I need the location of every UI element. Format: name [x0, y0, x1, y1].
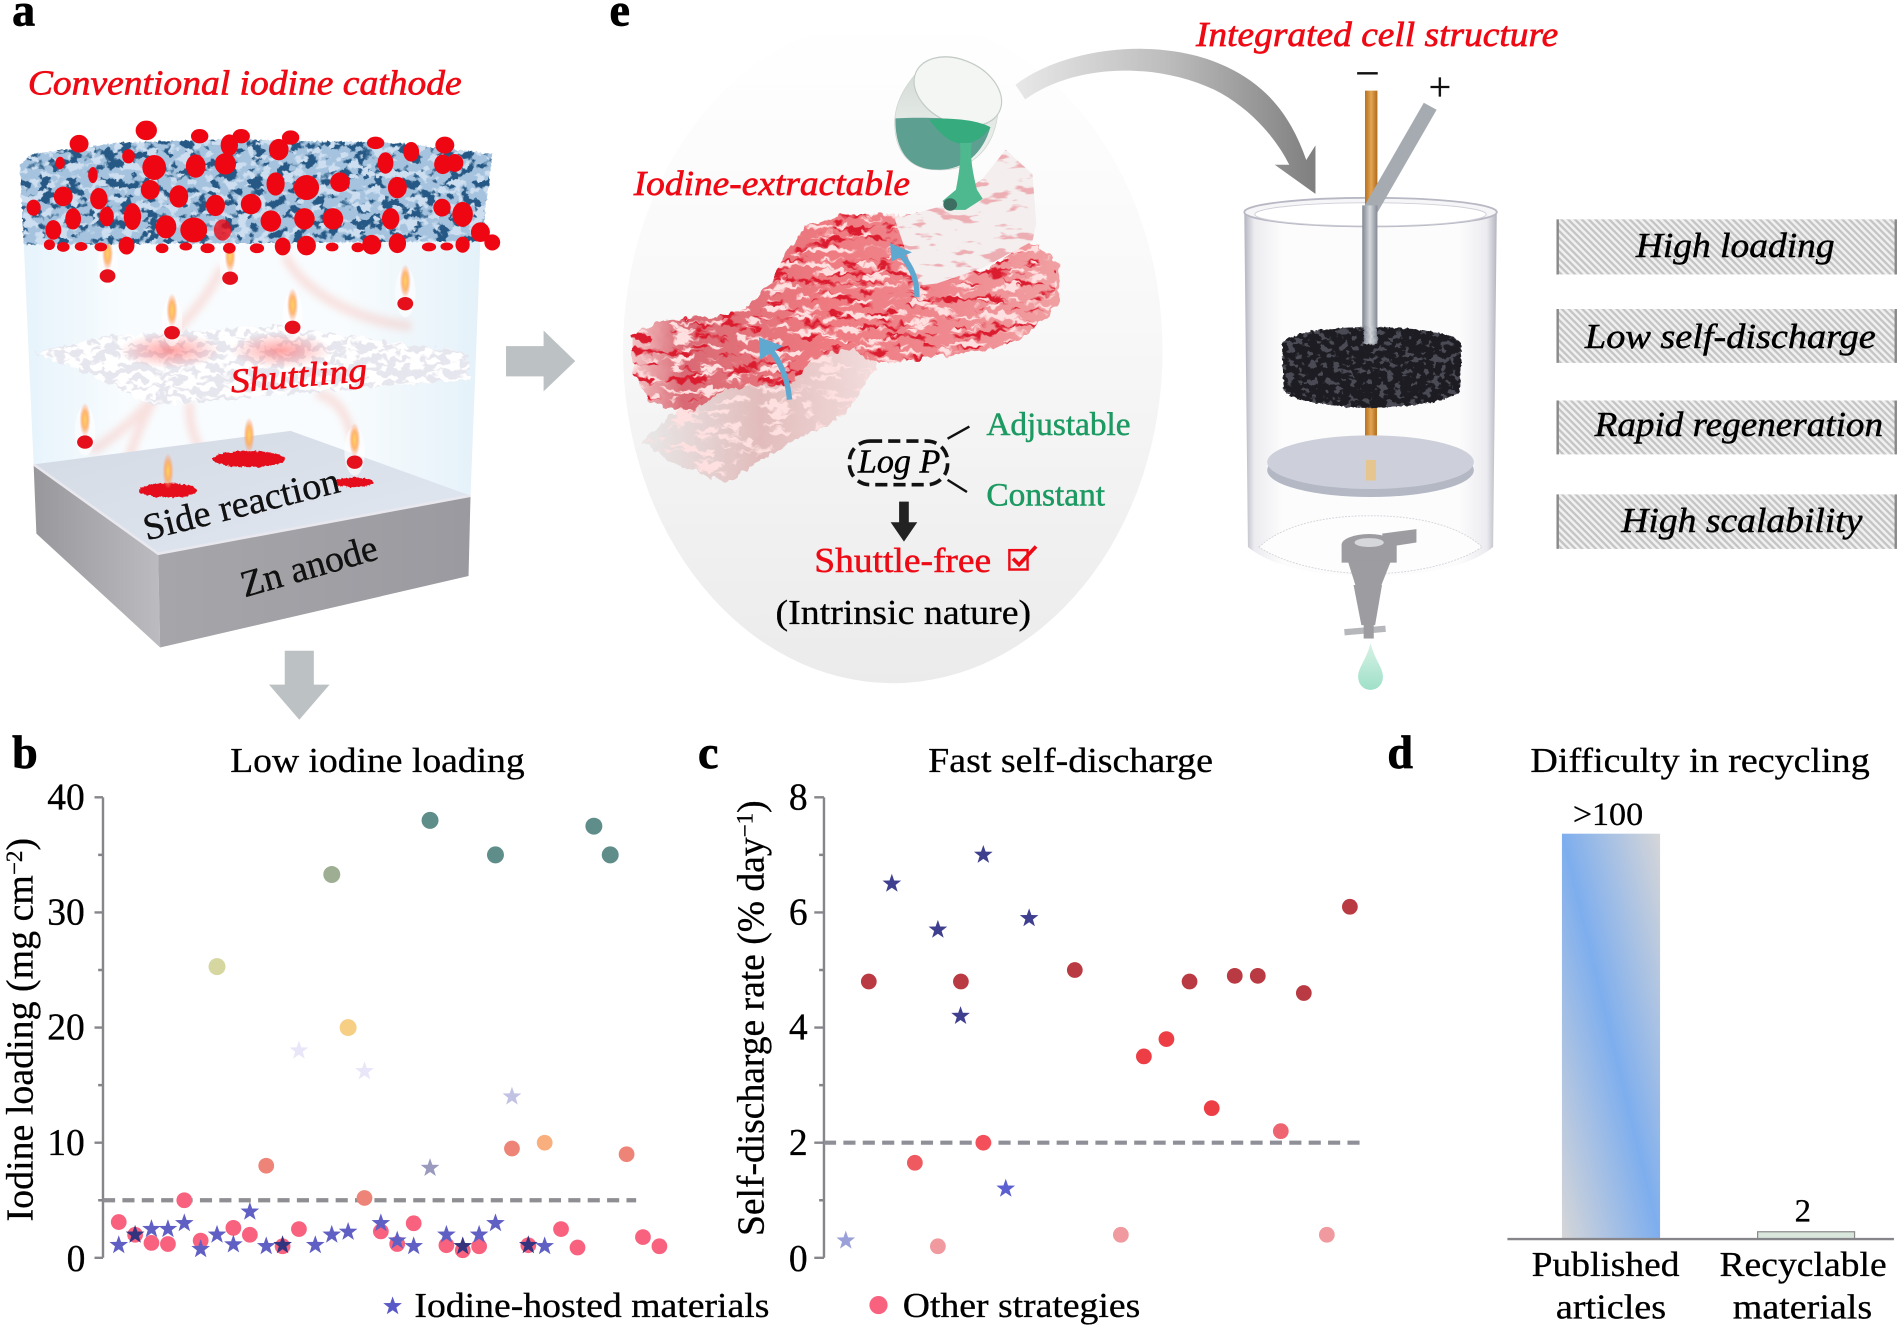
- label: Shuttling: Shuttling: [229, 352, 369, 401]
- threshold dashed line: [824, 1141, 1360, 1144]
- tag: High scalability: High scalability: [1620, 501, 1863, 540]
- arrow: a to b: [269, 651, 330, 720]
- steel rod: [1362, 205, 1377, 344]
- baseline: [1507, 1238, 1894, 1240]
- y axis title: ): [0, 838, 42, 851]
- panel label d: d: [1387, 727, 1413, 778]
- panel d: difficulty in recycling bar chart: [1387, 727, 1894, 1326]
- tag: High loading: [1556, 219, 1896, 274]
- minus terminal: [1357, 72, 1378, 75]
- y axis: 4: [789, 1008, 808, 1049]
- plus terminal: +: [1429, 65, 1451, 110]
- bar: published articles: >100: [1573, 797, 1643, 833]
- y axis: 10: [47, 1123, 85, 1164]
- copper electrode lower: [1365, 404, 1377, 462]
- illustration: shuttling cell: [20, 121, 500, 647]
- Log P dashed callout: [849, 427, 969, 492]
- green droplet: [1358, 643, 1383, 690]
- bar: published articles: [1562, 797, 1660, 1238]
- reaction pits on zinc: [140, 451, 374, 497]
- chart title: Difficulty in recycling: [1530, 741, 1870, 780]
- y axis title: Self-discharge rate (% day: [731, 837, 772, 1236]
- upper red ribbon: [633, 214, 1059, 413]
- label: Adjustable: Adjustable: [986, 407, 1131, 443]
- arrow: Log P to shuttle-free: [891, 502, 917, 542]
- Zn anode block: [34, 431, 471, 647]
- tag: High scalability: [1556, 494, 1896, 549]
- y axis: 0: [67, 1239, 85, 1280]
- x label: Published articles: [1532, 1245, 1680, 1326]
- porous cathode slab with iodine: [20, 121, 500, 255]
- chart title: Fast self-discharge: [928, 741, 1213, 780]
- advantages list: [1556, 219, 1896, 549]
- zinc disc: [1267, 435, 1474, 497]
- y axis: 30: [47, 893, 85, 934]
- x label: Recyclable materials: Recyclable: [1719, 1245, 1887, 1284]
- panel a: conventional iodine cathode: [12, 0, 500, 647]
- drain valve: [1342, 529, 1416, 639]
- data: other strategies circles: [111, 812, 667, 1258]
- curved arrow: electrolyte to cell: [1015, 49, 1315, 194]
- panel e: iodine-extractable electrolyte: [610, 0, 1163, 683]
- blue flow arrows: [765, 250, 917, 400]
- y axis: 20: [47, 1008, 85, 1049]
- panel c: fast self-discharge scatter chart: [698, 727, 1360, 1325]
- illustration: circular backdrop with iodine extraction: [623, 18, 1163, 683]
- y axis: [47, 777, 103, 1280]
- threshold dashed line: [103, 1198, 636, 1202]
- y axis: [789, 777, 824, 1280]
- tilted beaker: [895, 45, 1009, 211]
- y axis: 6: [789, 893, 808, 934]
- data: circles: [861, 899, 1358, 1254]
- y axis title: −2: [1, 851, 27, 875]
- tag: Rapid regeneration: [1556, 400, 1896, 454]
- translucent electrolyte column: [24, 241, 480, 496]
- heading: Integrated cell structure: Integrated cell structure: [1195, 15, 1558, 54]
- backdrop circle: [623, 18, 1163, 683]
- y axis title: ): [731, 800, 772, 813]
- y axis: 8: [789, 777, 808, 818]
- glass cylinder: [1244, 198, 1497, 576]
- label: Intrinsic nature: (Intrinsic nature): [776, 593, 1031, 632]
- heading: Iodine-extractable: Iodine-extractable: [633, 164, 910, 203]
- tag: High loading: High loading: [1635, 226, 1835, 265]
- label: Side reaction: Side reaction: [139, 461, 344, 549]
- x label: Published articles: articles: [1556, 1287, 1666, 1326]
- steel branch electrode: [1371, 106, 1430, 210]
- porous separator sheet: [36, 326, 469, 404]
- panel label c: c: [698, 727, 718, 778]
- label: Zn anode: Zn anode: [236, 528, 382, 606]
- label: Constant: Constant: [986, 477, 1105, 513]
- copper electrode upper: [1365, 91, 1377, 207]
- arrow: a to e: [506, 330, 575, 391]
- y axis: 0: [789, 1239, 808, 1280]
- icon: red check box: [1009, 547, 1036, 570]
- tag: Low self-discharge: [1556, 309, 1896, 363]
- y axis: 2: [789, 1123, 808, 1164]
- y axis title: Iodine loading (mg cm: [0, 875, 42, 1221]
- Log P dashed callout: Log P: [857, 444, 940, 481]
- data: iodine-hosted stars: [109, 1041, 554, 1257]
- x label: Recyclable materials: materials: [1733, 1287, 1872, 1326]
- legend: iodine-hosted materials: Iodine-hosted materials: [414, 1286, 769, 1325]
- x label: Published articles: Published: [1532, 1245, 1680, 1284]
- iodine droplets: [75, 237, 416, 489]
- data: stars: [836, 845, 1038, 1249]
- y axis: 40: [47, 777, 85, 818]
- carbon foam electrode: [1282, 326, 1461, 407]
- tag: Rapid regeneration: Rapid regeneration: [1594, 405, 1883, 444]
- panel label b: b: [12, 727, 38, 778]
- illustration: integrated cell: [1244, 91, 1497, 690]
- x label: Recyclable materials: [1719, 1245, 1887, 1326]
- lower pale ribbon: [642, 330, 879, 482]
- legend: other strategies: Other strategies: [903, 1286, 1140, 1325]
- chart title: Low iodine loading: [230, 741, 525, 780]
- bar: recyclable materials: 2: [1795, 1193, 1811, 1229]
- heading: Conventional iodine cathode: Conventional iodine cathode: [28, 64, 462, 103]
- red shuttling wisps: [91, 255, 411, 514]
- label: Shuttle-free: Shuttle-free: [814, 541, 991, 580]
- bar: recyclable materials: [1758, 1193, 1855, 1239]
- tag: Low self-discharge: Low self-discharge: [1584, 317, 1876, 356]
- panel b: low iodine loading scatter chart: [0, 727, 769, 1325]
- extracted white section: [895, 150, 1036, 286]
- y axis title: −1: [731, 813, 757, 837]
